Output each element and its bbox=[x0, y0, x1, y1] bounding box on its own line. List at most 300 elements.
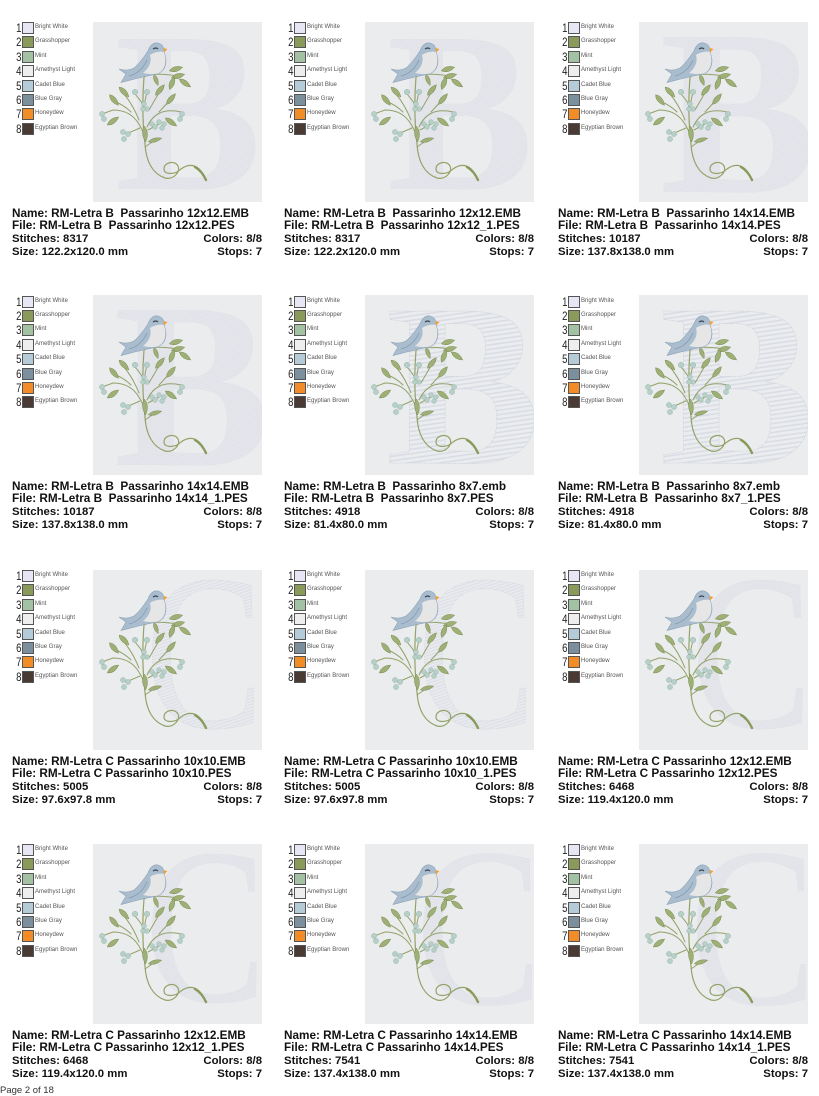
colour legend bbox=[562, 569, 623, 684]
colour legend: 2 bbox=[16, 309, 22, 323]
file details bbox=[558, 480, 808, 531]
colour legend: 3 bbox=[288, 50, 294, 64]
colour legend: 4 bbox=[288, 64, 294, 78]
file details: Name: RM-Letra C Passarinho 12x12.EMB bbox=[558, 754, 792, 768]
colour legend: 4 bbox=[562, 886, 568, 900]
colour legend: 5 bbox=[562, 79, 568, 93]
file details bbox=[12, 480, 262, 531]
colour legend: Egyptian Brown bbox=[35, 947, 77, 953]
file details: Stops: 7 bbox=[763, 519, 808, 531]
colour legend: 3 bbox=[562, 323, 568, 337]
file details: Name: RM-Letra B Passarinho 14x14.EMB bbox=[12, 480, 249, 492]
colour legend: 7 bbox=[288, 107, 294, 121]
file details: Colors: 8/8 bbox=[475, 781, 534, 793]
colour legend bbox=[288, 843, 349, 958]
file details: File: RM-Letra C Passarinho 12x12.PES bbox=[558, 767, 777, 780]
file details: File: RM-Letra B Passarinho 14x14_1.PES bbox=[12, 492, 248, 505]
colour legend: 4 bbox=[288, 886, 294, 900]
file details: Name: RM-Letra B Passarinho 8x7.emb bbox=[558, 480, 780, 492]
file details: Stitches: 6468 bbox=[12, 1055, 88, 1067]
colour legend: 3 bbox=[16, 598, 22, 612]
colour legend: 2 bbox=[288, 583, 294, 597]
colour legend: Blue Gray bbox=[307, 96, 334, 102]
file details bbox=[12, 206, 262, 258]
colour legend: Cadet Blue bbox=[307, 904, 337, 910]
panel: C 10x10 PES 1 bbox=[284, 569, 534, 806]
file details: Colors: 8/8 bbox=[203, 506, 262, 518]
colour legend: Cadet Blue bbox=[581, 904, 611, 910]
file details: Size: 122.2x120.0 mm bbox=[284, 246, 400, 258]
colour legend: 4 bbox=[562, 64, 568, 78]
colour legend: 1 bbox=[562, 294, 568, 308]
file details: Stops: 7 bbox=[489, 794, 534, 806]
colour legend: Mint bbox=[307, 53, 318, 59]
colour legend bbox=[562, 843, 623, 958]
colour legend: Grasshopper bbox=[35, 38, 70, 44]
colour legend bbox=[16, 569, 77, 684]
file details: Name: RM-Letra C Passarinho 14x14.EMB bbox=[558, 1028, 792, 1042]
colour legend: Grasshopper bbox=[307, 586, 342, 592]
file details: Size: 122.2x120.0 mm bbox=[12, 246, 128, 258]
colour legend: Honeydew bbox=[581, 110, 610, 116]
colour legend: Blue Gray bbox=[581, 370, 608, 376]
colour legend: Amethyst Light bbox=[35, 341, 75, 347]
colour legend: Blue Gray bbox=[35, 644, 62, 650]
colour legend: 5 bbox=[16, 627, 22, 641]
panel: B 14x14 PES 1 bbox=[12, 294, 262, 531]
colour legend: 7 bbox=[16, 929, 22, 943]
colour legend: 8 bbox=[562, 122, 568, 136]
colour legend: Cadet Blue bbox=[35, 630, 65, 636]
colour legend: 7 bbox=[562, 107, 568, 121]
colour legend: 6 bbox=[288, 93, 294, 107]
colour legend: 5 bbox=[288, 627, 294, 641]
file details: Colors: 8/8 bbox=[203, 781, 262, 793]
file details: Name: RM-Letra B Passarinho 14x14.EMB bbox=[558, 206, 795, 220]
colour legend: 6 bbox=[288, 366, 294, 380]
colour legend: 3 bbox=[16, 872, 22, 886]
colour legend: Blue Gray bbox=[35, 96, 62, 102]
colour legend: 1 bbox=[16, 843, 22, 857]
colour legend: 8 bbox=[562, 395, 568, 409]
colour legend: Egyptian Brown bbox=[35, 125, 77, 131]
colour legend: 7 bbox=[16, 655, 22, 669]
file details: Stitches: 4918 bbox=[284, 506, 360, 518]
colour legend: Cadet Blue bbox=[307, 82, 337, 88]
colour legend: Mint bbox=[35, 875, 46, 881]
colour legend: 2 bbox=[288, 309, 294, 323]
file details: Colors: 8/8 bbox=[749, 506, 808, 518]
colour legend: Bright White bbox=[307, 24, 340, 30]
colour legend: 4 bbox=[562, 338, 568, 352]
colour legend: Bright White bbox=[581, 846, 614, 852]
file details: Size: 97.6x97.8 mm bbox=[12, 794, 115, 806]
panel: B 8x7 emb bbox=[284, 294, 534, 531]
colour legend: Honeydew bbox=[35, 658, 64, 664]
colour legend: 2 bbox=[562, 309, 568, 323]
colour legend bbox=[288, 569, 349, 684]
colour legend: Bright White bbox=[581, 24, 614, 30]
file details: Colors: 8/8 bbox=[749, 233, 808, 245]
colour legend: Grasshopper bbox=[35, 312, 70, 318]
file details: Stitches: 8317 bbox=[12, 233, 88, 245]
file details: Name: RM-Letra C Passarinho 10x10.EMB bbox=[284, 754, 518, 768]
colour legend: 8 bbox=[16, 944, 22, 958]
colour legend: Mint bbox=[307, 875, 318, 881]
colour legend bbox=[16, 843, 77, 958]
colour legend bbox=[562, 294, 623, 409]
colour legend: 4 bbox=[16, 612, 22, 626]
file details: Size: 137.8x138.0 mm bbox=[558, 246, 674, 258]
colour legend: 6 bbox=[562, 915, 568, 929]
colour legend: 2 bbox=[288, 857, 294, 871]
colour legend: Cadet Blue bbox=[581, 82, 611, 88]
file details: Stops: 7 bbox=[489, 246, 534, 258]
file details: Stitches: 10187 bbox=[558, 233, 641, 245]
colour legend: 5 bbox=[562, 627, 568, 641]
colour legend: Honeydew bbox=[307, 384, 336, 390]
colour legend: 3 bbox=[562, 872, 568, 886]
colour legend: Grasshopper bbox=[35, 586, 70, 592]
file details: Stops: 7 bbox=[489, 1068, 534, 1080]
colour legend: Grasshopper bbox=[581, 586, 616, 592]
file details: Stitches: 7541 bbox=[558, 1055, 634, 1067]
colour legend: Bright White bbox=[35, 24, 68, 30]
colour legend: 5 bbox=[16, 352, 22, 366]
colour legend: Bright White bbox=[307, 572, 340, 578]
colour legend: Amethyst Light bbox=[35, 889, 75, 895]
colour legend: 2 bbox=[562, 583, 568, 597]
colour legend: 2 bbox=[16, 857, 22, 871]
colour legend: Blue Gray bbox=[581, 96, 608, 102]
colour legend: 7 bbox=[562, 655, 568, 669]
colour legend: Honeydew bbox=[35, 110, 64, 116]
file details: Size: 119.4x120.0 mm bbox=[558, 794, 673, 806]
colour legend: 1 bbox=[16, 21, 22, 35]
colour legend bbox=[16, 294, 77, 409]
colour legend: Amethyst Light bbox=[307, 341, 347, 347]
colour legend: Egyptian Brown bbox=[307, 125, 349, 131]
colour legend: 2 bbox=[562, 35, 568, 49]
panel: C 10x10 EMB bbox=[12, 569, 262, 806]
colour legend: 5 bbox=[562, 352, 568, 366]
colour legend: Blue Gray bbox=[307, 370, 334, 376]
file details: Colors: 8/8 bbox=[203, 1055, 262, 1067]
colour legend: 1 bbox=[562, 21, 568, 35]
file details: File: RM-Letra C Passarinho 12x12_1.PES bbox=[12, 1041, 244, 1054]
panel: B 12x12 PES 1 bbox=[284, 21, 534, 258]
colour legend bbox=[288, 21, 349, 136]
colour legend bbox=[288, 294, 349, 409]
colour legend: Egyptian Brown bbox=[35, 673, 77, 679]
file details: File: RM-Letra C Passarinho 10x10.PES bbox=[12, 767, 231, 780]
file details: Stops: 7 bbox=[217, 1068, 262, 1080]
file details: File: RM-Letra C Passarinho 10x10_1.PES bbox=[284, 767, 516, 780]
colour legend: Blue Gray bbox=[307, 918, 334, 924]
colour legend: 6 bbox=[16, 366, 22, 380]
file details: File: RM-Letra B Passarinho 8x7.PES bbox=[284, 492, 494, 505]
colour legend: Cadet Blue bbox=[307, 355, 337, 361]
colour legend: 8 bbox=[288, 670, 294, 684]
file details bbox=[12, 1028, 262, 1080]
file details bbox=[284, 754, 534, 806]
colour legend: 3 bbox=[16, 50, 22, 64]
colour legend: 8 bbox=[562, 944, 568, 958]
panel: C 12x12 EMB bbox=[558, 569, 808, 806]
colour legend: Honeydew bbox=[307, 932, 336, 938]
colour legend: 7 bbox=[288, 655, 294, 669]
file details: Name: RM-Letra B Passarinho 8x7.emb bbox=[284, 480, 506, 492]
colour legend: 8 bbox=[16, 122, 22, 136]
colour legend: 2 bbox=[562, 857, 568, 871]
colour legend: 1 bbox=[16, 294, 22, 308]
file details: Colors: 8/8 bbox=[749, 781, 808, 793]
file details: Colors: 8/8 bbox=[203, 233, 262, 245]
colour legend: Mint bbox=[581, 53, 592, 59]
colour legend: Honeydew bbox=[35, 384, 64, 390]
colour legend: 1 bbox=[562, 569, 568, 583]
colour legend: 2 bbox=[16, 583, 22, 597]
colour legend: 7 bbox=[16, 381, 22, 395]
file details: Stops: 7 bbox=[763, 246, 808, 258]
colour legend: 7 bbox=[288, 929, 294, 943]
file details: Stitches: 5005 bbox=[12, 781, 88, 793]
colour legend: Honeydew bbox=[35, 932, 64, 938]
colour legend: Mint bbox=[35, 326, 46, 332]
colour legend: Amethyst Light bbox=[581, 889, 621, 895]
file details: Size: 119.4x120.0 mm bbox=[12, 1068, 127, 1080]
file details: File: RM-Letra B Passarinho 14x14.PES bbox=[558, 219, 781, 232]
colour legend: 8 bbox=[288, 122, 294, 136]
colour legend: 6 bbox=[562, 93, 568, 107]
file details: Size: 137.8x138.0 mm bbox=[12, 519, 128, 531]
file details bbox=[12, 754, 262, 806]
file details: Size: 81.4x80.0 mm bbox=[558, 519, 661, 531]
colour legend: 1 bbox=[288, 569, 294, 583]
colour legend: Honeydew bbox=[307, 658, 336, 664]
colour legend: 3 bbox=[288, 323, 294, 337]
colour legend: Amethyst Light bbox=[307, 67, 347, 73]
colour legend: 6 bbox=[16, 93, 22, 107]
colour legend: 8 bbox=[16, 395, 22, 409]
colour legend: Mint bbox=[581, 601, 592, 607]
colour legend: Amethyst Light bbox=[581, 341, 621, 347]
file details: Size: 81.4x80.0 mm bbox=[284, 519, 387, 531]
file details: File: RM-Letra B Passarinho 12x12.PES bbox=[12, 219, 235, 232]
file details bbox=[558, 206, 808, 258]
file details: Stitches: 4918 bbox=[558, 506, 634, 518]
colour legend: Mint bbox=[307, 326, 318, 332]
colour legend: 3 bbox=[288, 598, 294, 612]
file details: File: RM-Letra B Passarinho 8x7_1.PES bbox=[558, 492, 781, 505]
colour legend: Amethyst Light bbox=[581, 67, 621, 73]
colour legend bbox=[562, 21, 623, 136]
colour legend: Cadet Blue bbox=[35, 904, 65, 910]
file details: File: RM-Letra C Passarinho 14x14.PES bbox=[284, 1041, 503, 1054]
colour legend: 7 bbox=[288, 381, 294, 395]
embroidery preview: letter C with bird bbox=[93, 570, 262, 750]
colour legend: 4 bbox=[288, 612, 294, 626]
file details: Size: 137.4x138.0 mm bbox=[558, 1068, 674, 1080]
colour legend: Mint bbox=[35, 53, 46, 59]
panel: B 12x12 EMB bbox=[12, 21, 262, 258]
panel: B 8x7 PES 1 bbox=[558, 294, 808, 531]
colour legend: Cadet Blue bbox=[35, 355, 65, 361]
colour legend: Egyptian Brown bbox=[307, 398, 349, 404]
file details bbox=[558, 1028, 808, 1080]
colour legend: 3 bbox=[562, 598, 568, 612]
colour legend: 6 bbox=[288, 915, 294, 929]
embroidery preview: letter C with bird bbox=[93, 844, 262, 1024]
colour legend: Egyptian Brown bbox=[581, 125, 623, 131]
file details: Stops: 7 bbox=[763, 1068, 808, 1080]
colour legend: 2 bbox=[288, 35, 294, 49]
colour legend: Cadet Blue bbox=[35, 82, 65, 88]
colour legend: Grasshopper bbox=[581, 38, 616, 44]
file details: Stitches: 10187 bbox=[12, 506, 95, 518]
file details: Colors: 8/8 bbox=[475, 1055, 534, 1067]
colour legend: 2 bbox=[16, 35, 22, 49]
colour legend: 8 bbox=[562, 670, 568, 684]
file details: Stops: 7 bbox=[217, 246, 262, 258]
colour legend: 5 bbox=[288, 79, 294, 93]
colour legend: Blue Gray bbox=[35, 918, 62, 924]
file details: File: RM-Letra B Passarinho 12x12_1.PES bbox=[284, 219, 520, 232]
file details: Stops: 7 bbox=[489, 519, 534, 531]
panel: B 14x14 EMB bbox=[558, 21, 808, 258]
colour legend: Bright White bbox=[307, 298, 340, 304]
colour legend: Mint bbox=[581, 875, 592, 881]
colour legend: Honeydew bbox=[581, 658, 610, 664]
colour legend: 6 bbox=[562, 366, 568, 380]
colour legend: 4 bbox=[16, 338, 22, 352]
colour legend: 5 bbox=[288, 352, 294, 366]
colour legend: 6 bbox=[16, 641, 22, 655]
colour legend: Grasshopper bbox=[35, 860, 70, 866]
colour legend: Amethyst Light bbox=[581, 615, 621, 621]
colour legend: 4 bbox=[16, 886, 22, 900]
colour legend: Egyptian Brown bbox=[581, 673, 623, 679]
colour legend: Egyptian Brown bbox=[581, 947, 623, 953]
colour legend: Honeydew bbox=[581, 932, 610, 938]
colour legend: 3 bbox=[288, 872, 294, 886]
colour legend: Egyptian Brown bbox=[307, 947, 349, 953]
file details bbox=[284, 1028, 534, 1080]
colour legend: 1 bbox=[288, 294, 294, 308]
colour legend: Cadet Blue bbox=[581, 355, 611, 361]
colour legend: 4 bbox=[16, 64, 22, 78]
file details: Colors: 8/8 bbox=[749, 1055, 808, 1067]
colour legend: 5 bbox=[16, 79, 22, 93]
colour legend: 6 bbox=[16, 915, 22, 929]
colour legend: Blue Gray bbox=[35, 370, 62, 376]
file details: Name: RM-Letra B Passarinho 12x12.EMB bbox=[284, 206, 521, 220]
colour legend: 7 bbox=[562, 929, 568, 943]
colour legend: Egyptian Brown bbox=[581, 398, 623, 404]
colour legend: Bright White bbox=[581, 298, 614, 304]
colour legend: Bright White bbox=[35, 298, 68, 304]
file details: Stops: 7 bbox=[763, 794, 808, 806]
panel: C 12x12 PES 1 bbox=[12, 843, 262, 1080]
colour legend: Blue Gray bbox=[581, 918, 608, 924]
file details: Colors: 8/8 bbox=[475, 233, 534, 245]
colour legend: Cadet Blue bbox=[581, 630, 611, 636]
embroidery preview: letter C with bird bbox=[639, 570, 808, 750]
colour legend: 3 bbox=[562, 50, 568, 64]
file details: Stitches: 6468 bbox=[558, 781, 634, 793]
colour legend: Egyptian Brown bbox=[307, 673, 349, 679]
colour legend: 1 bbox=[562, 843, 568, 857]
file details: Size: 137.4x138.0 mm bbox=[284, 1068, 400, 1080]
file details: Colors: 8/8 bbox=[475, 506, 534, 518]
colour legend: Grasshopper bbox=[581, 860, 616, 866]
colour legend: Grasshopper bbox=[581, 312, 616, 318]
colour legend: Grasshopper bbox=[307, 312, 342, 318]
file details: Stops: 7 bbox=[217, 794, 262, 806]
colour legend: 1 bbox=[288, 843, 294, 857]
colour legend: Amethyst Light bbox=[307, 615, 347, 621]
file details: Name: RM-Letra C Passarinho 10x10.EMB bbox=[12, 754, 246, 768]
file details bbox=[284, 480, 534, 531]
colour legend: Amethyst Light bbox=[35, 67, 75, 73]
colour legend: Amethyst Light bbox=[307, 889, 347, 895]
colour legend: 5 bbox=[562, 901, 568, 915]
colour legend: Honeydew bbox=[307, 110, 336, 116]
colour legend: Mint bbox=[581, 326, 592, 332]
file details: Stitches: 7541 bbox=[284, 1055, 360, 1067]
colour legend: 1 bbox=[16, 569, 22, 583]
colour legend: Bright White bbox=[35, 846, 68, 852]
colour legend: Mint bbox=[35, 601, 46, 607]
colour legend: Bright White bbox=[581, 572, 614, 578]
colour legend: 3 bbox=[16, 323, 22, 337]
colour legend: Egyptian Brown bbox=[35, 398, 77, 404]
file details: Name: RM-Letra C Passarinho 14x14.EMB bbox=[284, 1028, 518, 1042]
colour legend: 6 bbox=[288, 641, 294, 655]
colour legend: Bright White bbox=[307, 846, 340, 852]
page number footer: Page 2 of 18 bbox=[0, 1084, 54, 1096]
colour legend: Honeydew bbox=[581, 384, 610, 390]
panel: C 14x14 PES 1 bbox=[558, 843, 808, 1080]
colour legend: Mint bbox=[307, 601, 318, 607]
colour legend: Blue Gray bbox=[581, 644, 608, 650]
colour legend: Grasshopper bbox=[307, 38, 342, 44]
file details: Size: 97.6x97.8 mm bbox=[284, 794, 387, 806]
file details: File: RM-Letra C Passarinho 14x14_1.PES bbox=[558, 1041, 790, 1054]
file details: Stops: 7 bbox=[217, 519, 262, 531]
colour legend: Blue Gray bbox=[307, 644, 334, 650]
colour legend: 5 bbox=[288, 901, 294, 915]
colour legend: 7 bbox=[16, 107, 22, 121]
file details: Name: RM-Letra C Passarinho 12x12.EMB bbox=[12, 1028, 246, 1042]
colour legend: 4 bbox=[288, 338, 294, 352]
file details bbox=[558, 754, 808, 806]
embroidery preview: letter C with bird bbox=[365, 570, 534, 750]
colour legend: 1 bbox=[288, 21, 294, 35]
colour legend: Cadet Blue bbox=[307, 630, 337, 636]
colour legend: Amethyst Light bbox=[35, 615, 75, 621]
panel: C 14x14 EMB bbox=[284, 843, 534, 1080]
colour legend: 7 bbox=[562, 381, 568, 395]
colour legend: 6 bbox=[562, 641, 568, 655]
colour legend: 8 bbox=[288, 395, 294, 409]
colour legend: 8 bbox=[288, 944, 294, 958]
file details bbox=[284, 206, 534, 258]
colour legend: 8 bbox=[16, 670, 22, 684]
file details: Stitches: 8317 bbox=[284, 233, 360, 245]
colour legend: 5 bbox=[16, 901, 22, 915]
colour legend: Grasshopper bbox=[307, 860, 342, 866]
